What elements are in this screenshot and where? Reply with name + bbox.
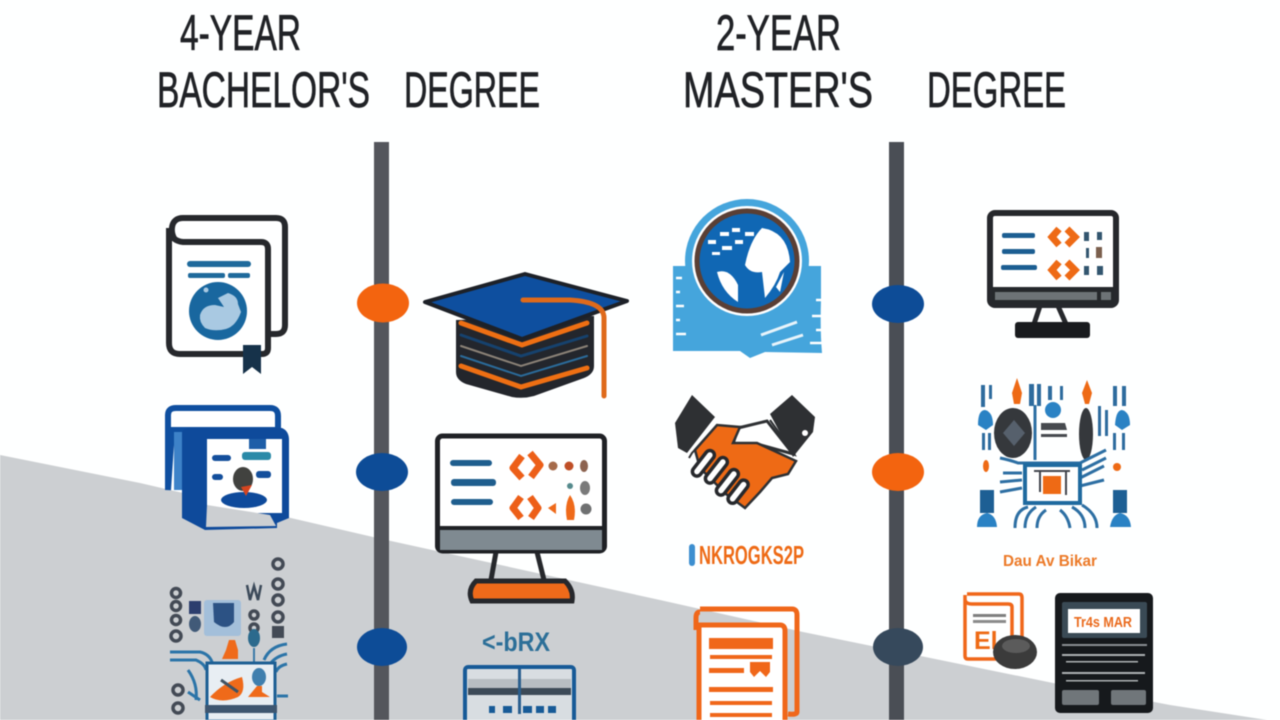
icon: computer monitor with code	[438, 436, 604, 601]
icon: browser window	[465, 667, 574, 720]
title: 2-year master's degree: DEGREE	[927, 62, 1066, 118]
icon: globe certificate	[673, 199, 822, 358]
title: 4-year bachelor's degree: 4-YEAR	[180, 5, 301, 61]
title: 4-year bachelor's degree: DEGREE	[404, 62, 540, 118]
timeline: master's	[872, 142, 924, 720]
icon: handshake	[675, 395, 815, 508]
label: garbled code tag: <-bRX	[482, 627, 550, 657]
title: 2-year master's degree: MASTER'S	[683, 62, 873, 118]
label: garbled orange heading: NKROGKS2P	[699, 540, 804, 570]
icon: tablet	[1055, 593, 1153, 713]
icon: small orange document with stone	[965, 594, 1037, 669]
title: 2-year master's degree: 2-YEAR	[716, 5, 841, 61]
icon: small orange document with stone: El	[974, 627, 998, 655]
icon: graduation cap	[425, 274, 627, 398]
title: 4-year bachelor's degree	[157, 5, 540, 118]
timeline: bachelor's	[356, 142, 409, 720]
label: garbled orange heading	[689, 540, 804, 570]
title: 2-year master's degree	[683, 5, 1066, 118]
title: 4-year bachelor's degree: BACHELOR'S	[157, 62, 370, 118]
icon: monitor with code (master's)	[990, 213, 1116, 338]
icon: tablet: Tr4s MAR	[1074, 614, 1132, 631]
icon: book with globe	[169, 218, 285, 374]
icon: circuit chip	[977, 378, 1131, 528]
icon: orange document	[696, 609, 797, 720]
icon: network cluster with laptop	[170, 559, 288, 720]
icon: blue book with person	[168, 408, 289, 530]
label: garbled small orange text: Dau Av Bikar	[1003, 553, 1097, 570]
